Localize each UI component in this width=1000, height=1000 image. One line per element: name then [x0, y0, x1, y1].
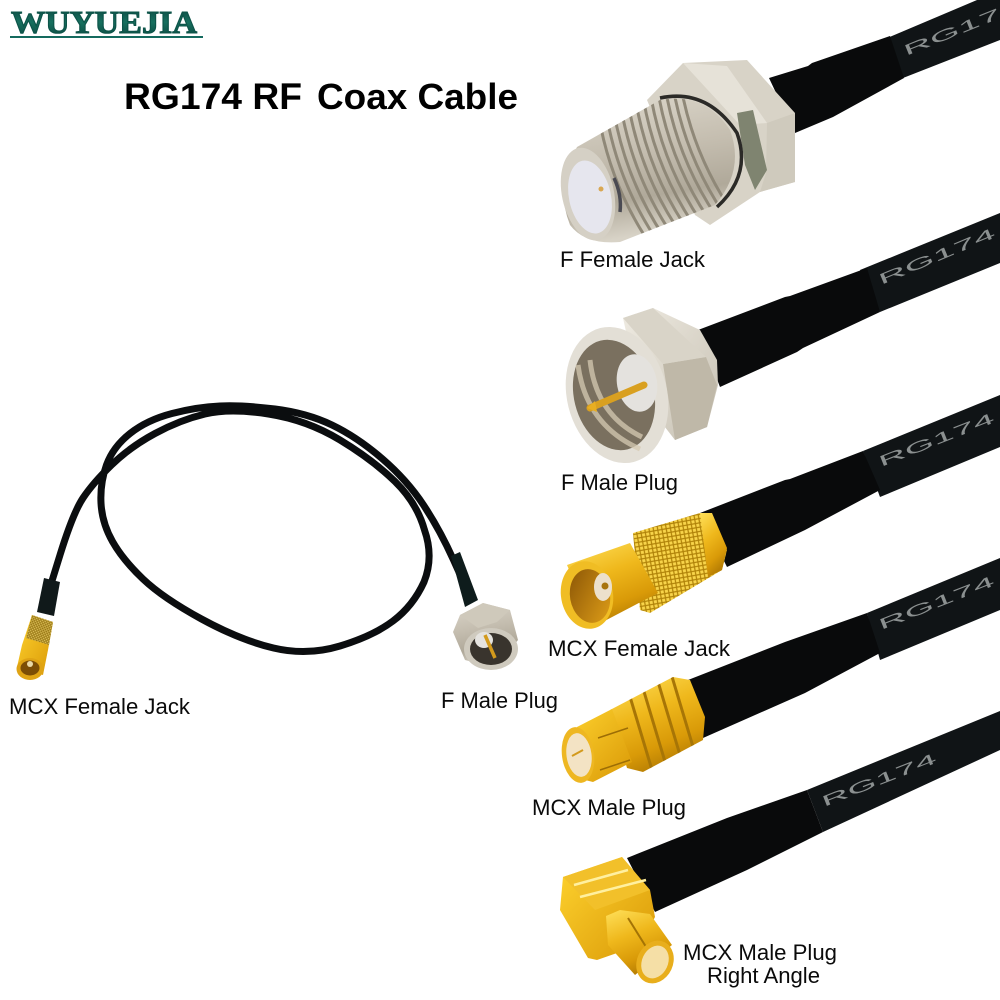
connector row: MCX Male Plug Right Angle [560, 711, 1000, 990]
coiled cable [37, 406, 478, 652]
label: left F Male Plug: F Male Plug [441, 688, 558, 713]
cable [700, 395, 1000, 567]
hex nut [647, 60, 795, 225]
connector row: F Male Plug [552, 213, 1000, 474]
label: MCX Male Plug Right Angle: Right Angle [707, 963, 820, 988]
logo: WUYUEJIA: WUYUEJIA [11, 4, 197, 40]
label: MCX Male Plug: MCX Male Plug [532, 795, 686, 820]
connector row: F Female Jack [553, 0, 1000, 258]
cable [769, 0, 1000, 133]
gold knurled body [555, 513, 727, 633]
label: MCX Male Plug Right Angle [683, 940, 837, 988]
connector row: MCX Male Plug [558, 558, 1000, 785]
title [124, 76, 518, 117]
label: F Male Plug: F Male Plug [561, 470, 678, 495]
label: F Female Jack: F Female Jack [560, 247, 706, 272]
connector row: MCX Female Jack [555, 395, 1000, 633]
threaded barrel [560, 94, 744, 242]
cable: RG174 [876, 573, 997, 634]
gold elbow body [560, 857, 655, 960]
cable: RG174 [876, 410, 997, 471]
label: left MCX Female Jack: MCX Female Jack [9, 694, 191, 719]
cable: RG174 [901, 0, 1000, 60]
hex nut [623, 308, 718, 440]
label: MCX Female Jack: MCX Female Jack [548, 636, 731, 661]
right connector: F male [453, 603, 518, 670]
gold ribbed body [558, 670, 705, 785]
gold plug barrel [606, 910, 681, 990]
cable: RG174 [819, 750, 939, 811]
cable: RG174 [876, 225, 998, 289]
label: MCX Male Plug Right Angle: MCX Male Plug [683, 940, 837, 965]
cable [688, 558, 1000, 738]
cable assembly: coiled black cable with connectors [16, 406, 518, 680]
title: Coax Cable [317, 76, 518, 117]
title: RG174 RF [124, 76, 302, 117]
mating face [552, 316, 682, 474]
cable [627, 711, 1000, 912]
cable [698, 213, 1000, 387]
left connector: MCX female [16, 615, 53, 680]
